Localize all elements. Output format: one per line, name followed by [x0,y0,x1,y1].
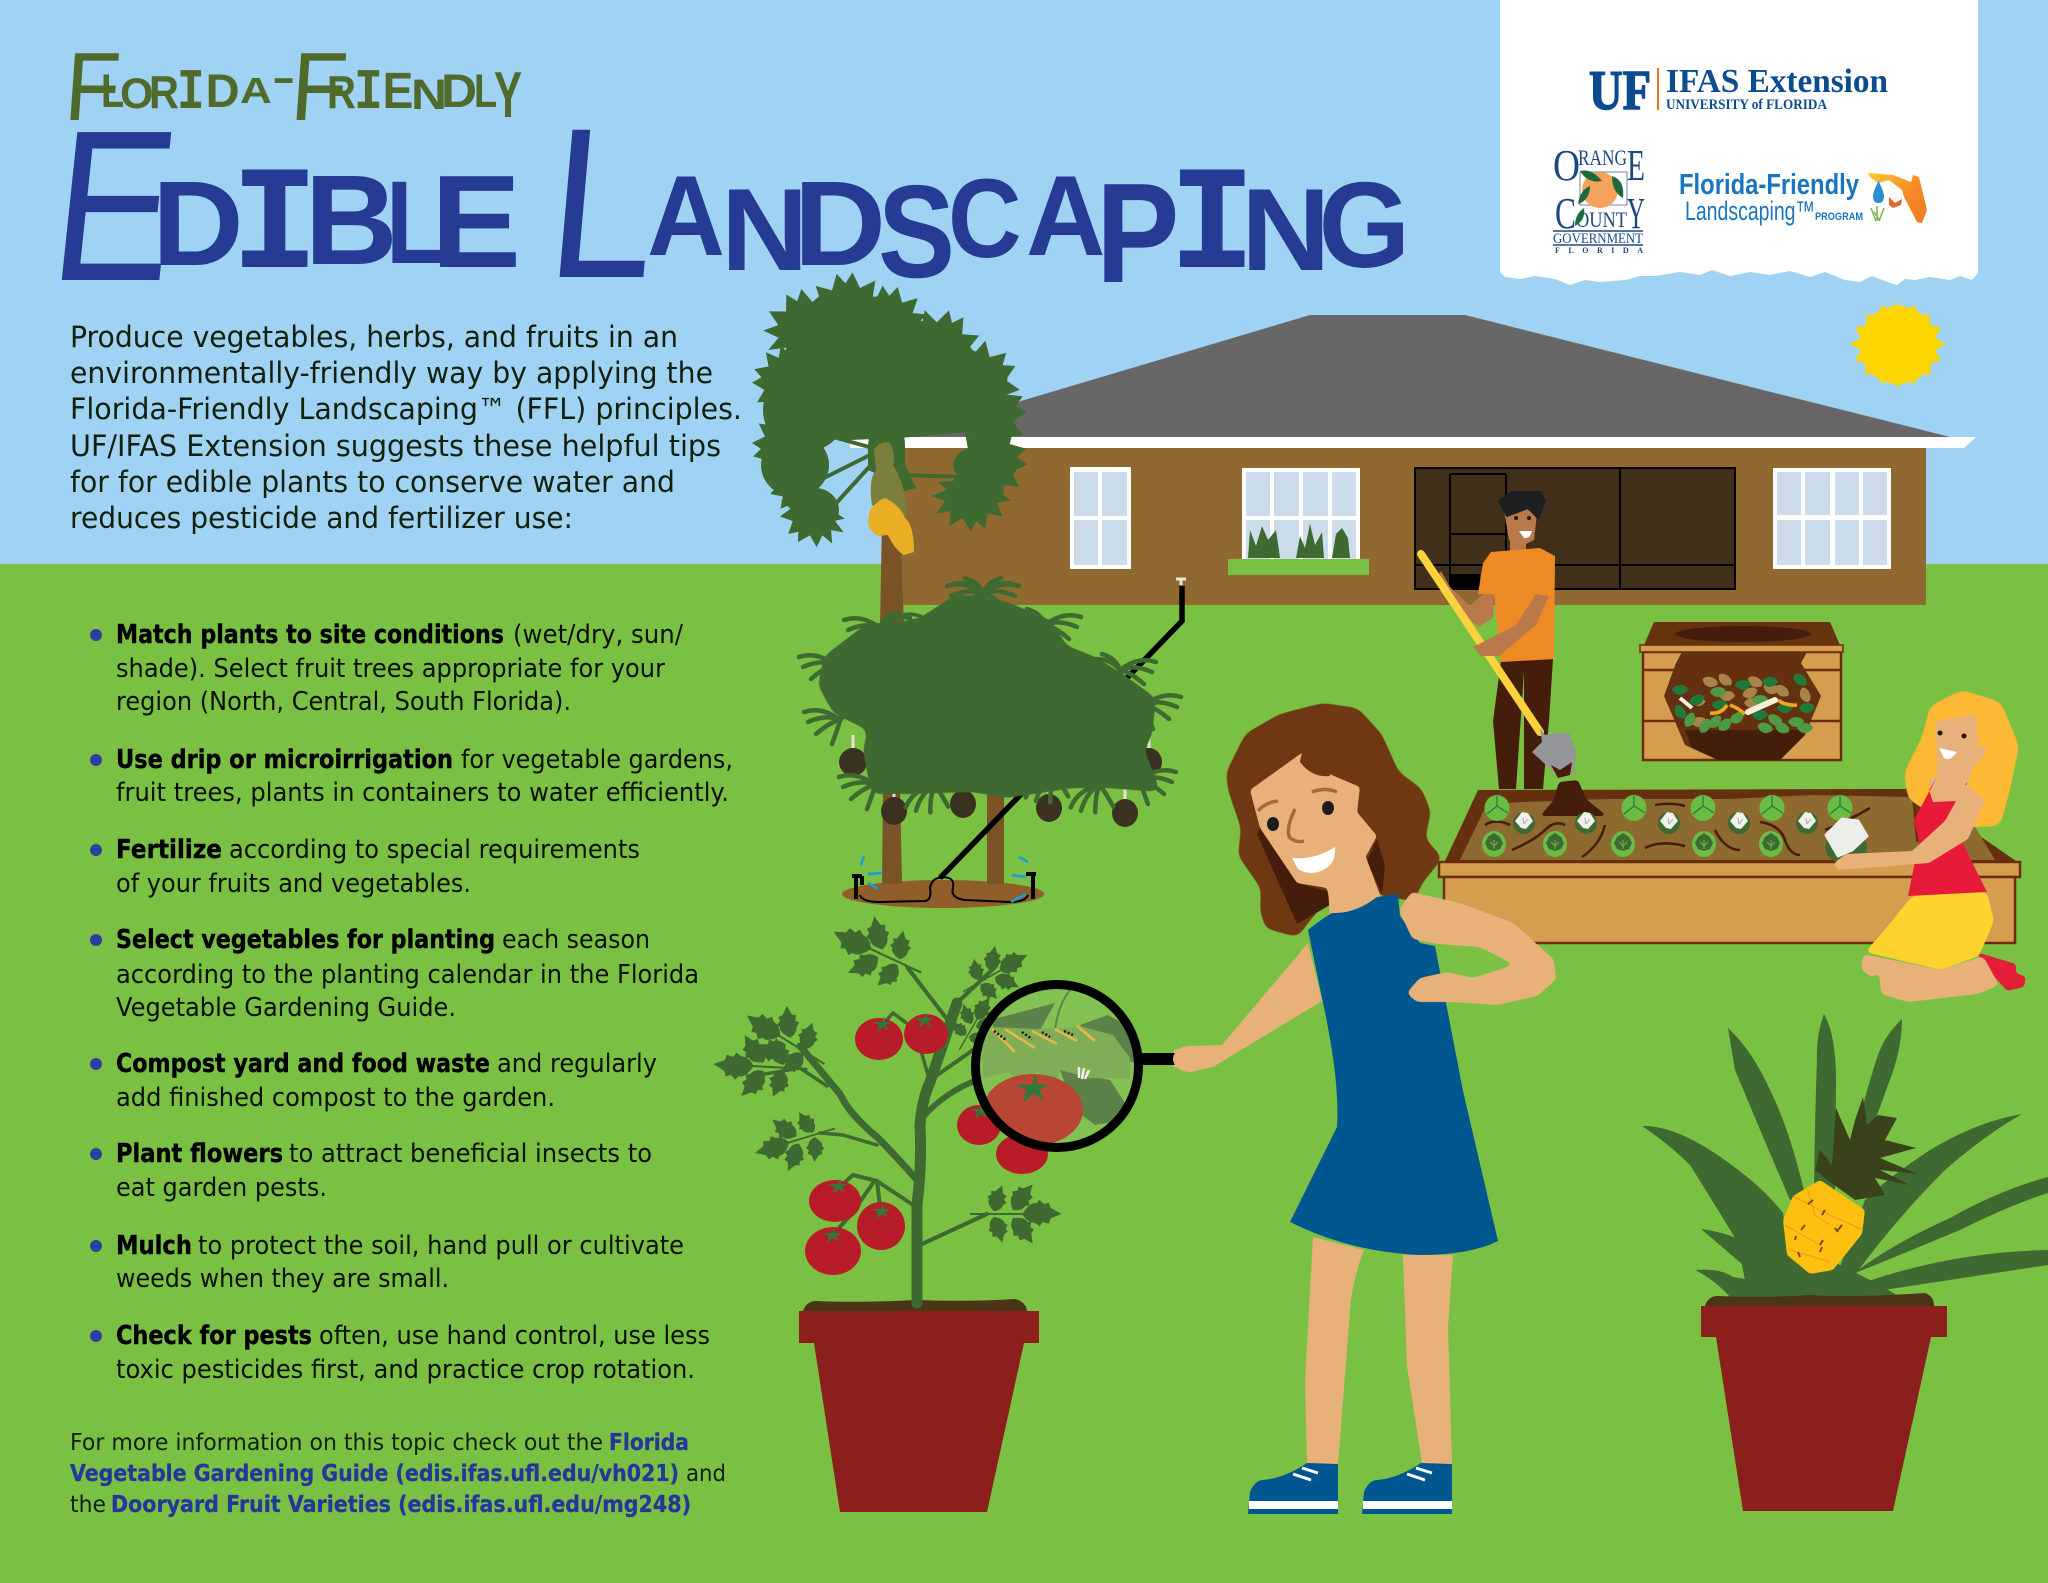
title: Edible Landscaping: L [386,157,445,288]
intro paragraph: Florida-Friendly Landscaping™ (FFL) principles. [70,392,742,426]
raised garden bed [1439,780,2020,943]
fascia [850,437,1976,448]
woman's legs [1305,1237,1453,1464]
title: Florida-Friendly: F [287,33,351,142]
Orange County logo: E [1627,141,1645,190]
tip: fertilize [90,835,640,899]
title: Edible Landscaping: S [878,159,955,306]
magnifying glass with hornworm [970,980,1207,1155]
tip: select vegetables [90,925,699,1023]
woman's face and neck [1250,752,1377,913]
shovel blade [1532,728,1576,777]
tip: compost [90,1049,657,1113]
hornworm markings [992,1026,1095,1052]
tip: pests: often, use hand control, use less [319,1321,710,1351]
gardener smile [1939,748,1957,759]
woman with magnifying glass [1173,705,1555,1514]
title: Florida-Friendly: I [177,61,205,126]
tip: compost: add finished compost to the garden. [116,1083,555,1113]
soil mound [842,880,1044,908]
Orange County logo: C [1555,189,1576,238]
compost bin [1640,622,1843,760]
title: Florida-Friendly: A [240,71,272,111]
intro paragraph: for for edible plants to conserve water and [70,465,675,499]
glass handle [1141,1053,1175,1065]
title: Edible Landscaping: A [1026,152,1105,279]
hornworm claws [1079,1067,1089,1079]
intro paragraph: environmentally-friendly way by applying the [70,356,713,390]
tip: flowers: Plant flowers [116,1139,283,1169]
woman's eyebrows and nose [1258,790,1337,842]
title: Edible Landscaping: B [305,149,398,292]
intro paragraph [70,320,742,535]
bin box [1643,652,1841,760]
blue dress [1290,894,1498,1255]
worm tracks [1485,804,1870,857]
woman's smile [1292,847,1335,873]
Orange County logo: OUNT [1576,207,1627,232]
right window [1773,468,1891,569]
woman's fringe [1300,747,1330,776]
woman's arm on hip [1400,893,1555,1004]
Florida state icon [1868,173,1927,223]
tip: mulch: weeds when they are small. [116,1264,449,1294]
sun [1850,302,1946,388]
Orange County logo [1553,141,1645,255]
Orange County logo: O [1553,141,1580,190]
tip: pests: toxic pesticides first, and practice crop rotation. [116,1355,695,1385]
title: Florida-Friendly: D [441,65,477,118]
soil pile [1540,780,1607,816]
title: Florida-Friendly: F [62,32,124,141]
further information note: Dooryard Fruit Varieties (edis.ifas.ufl.edu/mg248) [111,1492,691,1518]
canopy fronds [799,578,1181,828]
tip: site conditions [90,620,683,717]
house [850,315,1976,605]
tips list [90,620,733,1385]
further information note: Florida [609,1430,689,1456]
man's front arm [1473,594,1549,656]
bin planks [1643,670,1841,721]
pineapple pot soil [1705,1293,1934,1306]
unripe papayas [871,442,907,518]
tip: pests [90,1321,710,1385]
fruit stems [853,725,1149,800]
held cauliflower [1825,819,1867,864]
irrigation pipe [852,586,1182,902]
title: Edible Landscaping: A [647,151,725,280]
tip: mulch: Mulch [116,1231,192,1261]
title: Florida-Friendly: D [206,64,240,117]
tip: compost: Compost yard and food waste [116,1049,490,1079]
title: Florida-Friendly [62,32,522,142]
bed rim [1439,862,2020,877]
tip: mulch [90,1231,684,1294]
further information note [70,1430,726,1518]
tomato stems and branches [753,967,993,1303]
man's hair [1499,492,1545,518]
bed soil [1460,795,1995,860]
hanging fruit [839,748,1162,827]
further information note: and [686,1461,726,1487]
orange shirt [1478,548,1555,662]
title: Florida-Friendly: L [101,65,124,118]
title: Florida-Friendly: R [149,67,179,119]
title: Florida-Friendly: N [411,70,447,118]
tip: site conditions: shade). Select fruit trees appropriate for your [116,654,665,684]
logo panel [1500,0,1978,285]
papaya trunk [880,520,904,625]
background: lawn [0,564,2048,1583]
tip: select vegetables: Select vegetables for planting [116,925,495,955]
intro paragraph: UF/IFAS Extension suggests these helpful tips [70,429,721,463]
tomato pot [799,1311,1039,1512]
gardener arm [1834,783,1985,870]
man's neck and face [1503,505,1538,553]
tomato calyxes [822,1012,990,1243]
grass icon [1871,206,1884,221]
yellow skirt [1865,892,1994,970]
title: Edible Landscaping: C [948,156,1022,281]
compost cut-away [1664,652,1821,760]
bin lid [1644,622,1840,645]
tip: compost: and regularly [497,1049,657,1079]
gardener face and neck [1935,714,1987,790]
canopy [820,596,1158,796]
tip: irrigation: fruit trees, plants in containers to water efficiently. [116,778,729,808]
lens view [980,989,1134,1143]
tip: mulch: to protect the soil, hand pull or cultivate [198,1231,684,1261]
water spray [861,856,1028,902]
soil on shovel [1551,762,1572,778]
bin rim [1640,645,1843,652]
papaya crown head [868,421,916,491]
tip: select vegetables: each season [502,925,650,955]
pineapple leaves [1642,1014,2048,1297]
magnified leaves [990,1003,1140,1125]
pineapple fruit [1783,1180,1865,1274]
Florida-Friendly Landscaping logo: PROGRAM [1815,211,1863,223]
title: Florida-Friendly: Y [494,58,522,131]
butterfly icon [1889,197,1902,208]
title: Edible Landscaping: D [152,157,244,291]
woman's eyes [1267,801,1334,831]
right sneaker [1362,1463,1452,1514]
man's eyes [1516,516,1529,520]
tip: irrigation: for vegetable gardens, [461,745,733,775]
title: Florida-Friendly: I [354,60,383,125]
man's trousers [1493,659,1553,789]
tip: site conditions: (wet/dry, sun/ [513,620,683,650]
bed interior [1445,789,2016,861]
lens ring [976,984,1138,1148]
Orange County logo: RANG [1578,145,1627,170]
further information note: For more information on this topic check out the [70,1430,603,1456]
tip: select vegetables: Vegetable Gardening Guide. [116,993,456,1023]
woman's hair [1228,705,1440,935]
fingers [1173,1046,1207,1072]
title: Edible Landscaping: G [1318,157,1410,293]
tip: flowers: to attract beneficial insects to [289,1139,652,1169]
title: Edible Landscaping: L [540,83,667,322]
patio door [1415,468,1735,589]
background: sky [0,0,2048,565]
torn white card [1500,0,1978,285]
title: Florida-Friendly: L [474,65,497,118]
tomatoes [805,1014,1048,1275]
title: Edible Landscaping: N [721,165,808,296]
gardener eyes [1940,733,1964,736]
further information note: Vegetable Gardening Guide (edis.ifas.ufl.edu/vh021) [70,1461,679,1487]
tip: flowers [90,1139,652,1203]
title: Florida-Friendly: O [120,70,153,118]
tip: irrigation [90,745,733,808]
potted pineapple plant [1642,1014,2048,1511]
ripe papayas [868,498,914,555]
tree trunks [882,785,1004,884]
chest [1929,777,1966,810]
tip: fertilize: of your fruits and vegetables. [116,869,471,899]
Orange County logo: GOVERNMENT [1553,231,1643,247]
title: Edible Landscaping [42,83,1410,326]
left sneaker [1248,1463,1338,1514]
blonde hair [1904,690,2019,828]
bed side [1444,877,2015,943]
hair shadow [1257,828,1385,924]
pineapple crown [1815,1097,1918,1200]
Florida-Friendly Landscaping logo: Landscaping™ [1685,196,1815,226]
hornworm body [982,1027,1130,1082]
compost contents [1672,671,1815,736]
papaya tree [747,269,1036,625]
Florida-Friendly Landscaping logo [1679,169,1927,226]
tip: select vegetables: according to the planting calendar in the Florida [116,960,699,990]
title: Florida-Friendly: E [383,63,413,120]
papaya crown leaves [747,269,1036,561]
tip: pests: Check for pests [116,1321,312,1351]
legs [1861,954,1999,1002]
Orange County logo: FLORIDA [1555,246,1643,255]
potted tomato plant [711,897,1061,1512]
tomato leaves [711,897,1061,1250]
intro paragraph: Produce vegetables, herbs, and fruits in an [70,320,678,354]
intro paragraph: reduces pesticide and fertilizer use: [70,501,573,535]
roof [900,315,1950,437]
tip: irrigation: Use drip or microirrigation [116,745,453,775]
title: Edible Landscaping: E [431,148,521,296]
left window [1070,467,1131,569]
UF IFAS logo: IFAS Extension [1666,63,1888,100]
tip: site conditions: region (North, Central, South Florida). [116,687,571,717]
UF IFAS logo [1589,60,1888,122]
title: Edible Landscaping: D [794,156,886,291]
Orange County logo: Y [1627,189,1645,238]
UF IFAS logo: UNIVERSITY of FLORIDA [1666,97,1827,113]
lettuce row 1 [1484,795,1852,821]
man's rear arm [1435,571,1494,627]
man with shovel [1421,492,1576,789]
shoes [1976,952,2026,991]
kneeling gardener [1825,690,2026,1002]
pineapple pot [1701,1306,1947,1511]
avocado tree with drip irrigation [799,578,1186,908]
tomato pot soil [803,1299,1027,1311]
title: Edible Landscaping: P [1096,155,1179,313]
water drop icon [1873,181,1884,203]
woman's arm holding magnifier [1173,943,1322,1072]
cauliflower row [1513,812,1818,834]
man's smile [1519,531,1532,538]
tip: fertilize: according to special requirements [229,835,640,865]
title: Florida-Friendly: - [272,55,295,100]
title: Edible Landscaping: I [231,145,319,312]
title: Edible Landscaping: N [1241,164,1331,295]
Florida-Friendly Landscaping logo: Florida-Friendly [1679,169,1859,201]
lettuce row 2 [1482,831,1783,857]
woman's neck [1328,852,1382,920]
red tank top [1908,777,1987,896]
tip: fertilize: Fertilize [116,835,222,865]
UF IFAS logo: UF [1589,60,1651,122]
tip: flowers: eat garden pests. [116,1173,327,1203]
middle window with planter [1228,468,1369,575]
magnified tomato [983,1074,1083,1146]
title: Edible Landscaping: E [42,87,187,326]
shovel handle [1421,554,1540,732]
further information note: the [70,1492,106,1518]
title: Florida-Friendly: R [327,67,356,119]
wall [900,448,1926,605]
tip: site conditions: Match plants to site conditions [116,620,504,650]
title: Edible Landscaping: I [1169,143,1255,312]
